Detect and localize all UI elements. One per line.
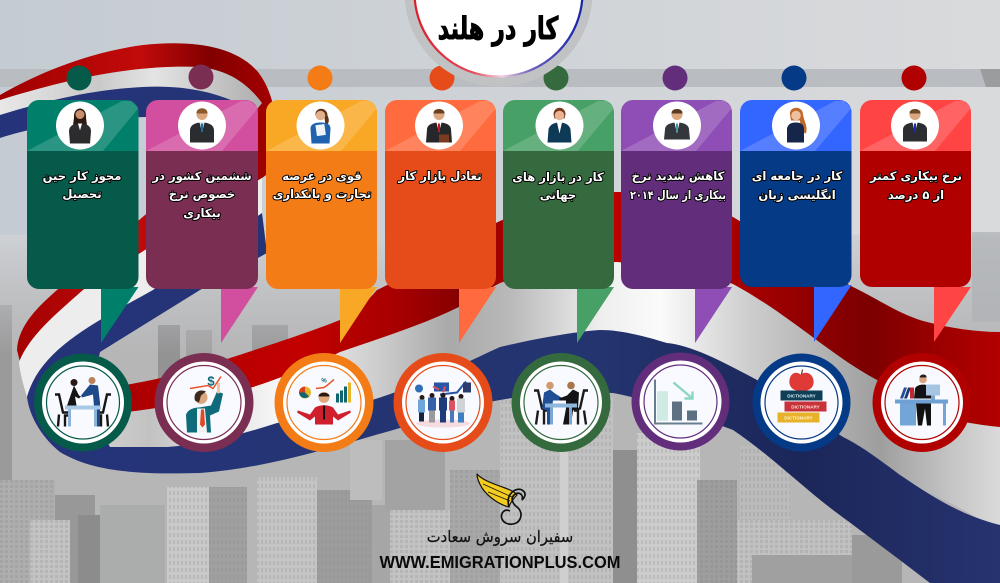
circle icon 5: two men negotiating (512, 353, 610, 452)
card text: بیکاری (183, 206, 221, 221)
avatar: woman in teal suit (536, 102, 584, 150)
card 4: labour market balance (385, 100, 496, 343)
title text: کار در هلند (438, 11, 559, 47)
card text: کار در جامعه ای (752, 169, 843, 184)
pointer (340, 287, 377, 343)
avatar: woman in black suit (56, 102, 104, 150)
title badge (404, 0, 592, 86)
card text: قوی در عرصه (282, 169, 362, 184)
pointer (934, 287, 971, 342)
ribbon: upper red loop (0, 43, 277, 362)
card text: تعادل بازار کار (397, 169, 482, 184)
card 6: unemployment drop since 2014 (621, 100, 732, 343)
card text: تحصیل (62, 187, 102, 201)
background: top haze overlay (0, 0, 1000, 235)
pointer (577, 287, 614, 343)
header and body (27, 100, 138, 170)
card text line 1: کاهش شدید نرخ (632, 169, 725, 184)
card 1: work permit (27, 100, 138, 343)
circle icon 2: man pointing at rising chart (154, 353, 254, 452)
ribbon: main blue band (27, 213, 1000, 583)
card text: از ۵ درصد (888, 188, 944, 203)
logo: winged emblem (477, 474, 525, 524)
ribbon: main grey band (100, 262, 1000, 530)
circle icon 3: businessman with charts (274, 353, 374, 452)
circle icon 1: handshake at table (34, 354, 132, 452)
card text: تجارت و بانکداری (273, 187, 371, 202)
avatar: man with glasses (178, 102, 226, 150)
header and body (385, 100, 496, 170)
header and body (503, 100, 614, 170)
avatar: woman in blue with folder (296, 102, 344, 150)
card text: مجوز کار حین (43, 169, 121, 184)
header and body (266, 100, 377, 170)
pointer (695, 287, 732, 343)
circle icon 6: falling bar chart (632, 352, 730, 450)
card text: ششمین کشور در (151, 169, 252, 184)
header and body (621, 100, 732, 170)
pointer (814, 285, 852, 342)
circle icon 8: man at desk (872, 353, 972, 452)
avatar: woman with long hair (772, 102, 820, 150)
card text: جهانی (540, 188, 576, 203)
card 3: trade and banking (266, 100, 377, 343)
avatar: man in grey suit (653, 102, 701, 150)
avatar: man with blue tie (891, 102, 939, 150)
header and body (146, 100, 258, 170)
card 8: unemployment under 5 percent (860, 100, 971, 342)
circle icon 7: dictionaries and apple (752, 354, 850, 452)
circle icon 2: man pointing at rising chart: $ (207, 374, 215, 388)
grey timeline bar (0, 69, 1000, 87)
card text: کار در بازار های (512, 170, 604, 185)
card 2: sixth country (146, 100, 258, 343)
circle icon 7: dictionaries and apple: DICTIONARY (784, 416, 813, 420)
circle icon 7: dictionaries and apple: DICTIONARY (787, 394, 816, 398)
card text: نرخ بیکاری کمتر (869, 169, 962, 184)
ribbon: main red band (100, 192, 1000, 427)
logo wordmark: سفیران سروش سعادت (427, 528, 573, 546)
card text line 2: بیکاری از سال ۲۰۱۴ (630, 188, 726, 202)
pointer (101, 287, 138, 343)
header and body (860, 100, 971, 170)
background: city skyline (0, 230, 1000, 583)
timeline dots (66, 64, 926, 90)
circle icon 7: dictionaries and apple: DICTIONARY (791, 404, 820, 410)
card text: انگلیسی زبان (758, 188, 836, 203)
wing (477, 474, 517, 507)
card 7: English-speaking community (740, 100, 852, 342)
circle icon 4: group of people with signs (394, 353, 492, 452)
header and body (740, 100, 852, 170)
website address: WWW.EMIGRATIONPLUS.COM (380, 552, 620, 572)
circle icon 3: businessman with charts: % (321, 378, 327, 384)
ribbon: upper blue arc (0, 87, 245, 138)
card 5: global markets (503, 100, 614, 343)
swan body (501, 489, 525, 524)
ribbon: upper white arc (0, 67, 262, 115)
pointer (221, 287, 258, 343)
ribbon: left white return (19, 178, 262, 397)
pointer (459, 287, 496, 343)
avatar: man with red tie (415, 102, 463, 150)
card text: خصوص نرخ (169, 187, 235, 202)
